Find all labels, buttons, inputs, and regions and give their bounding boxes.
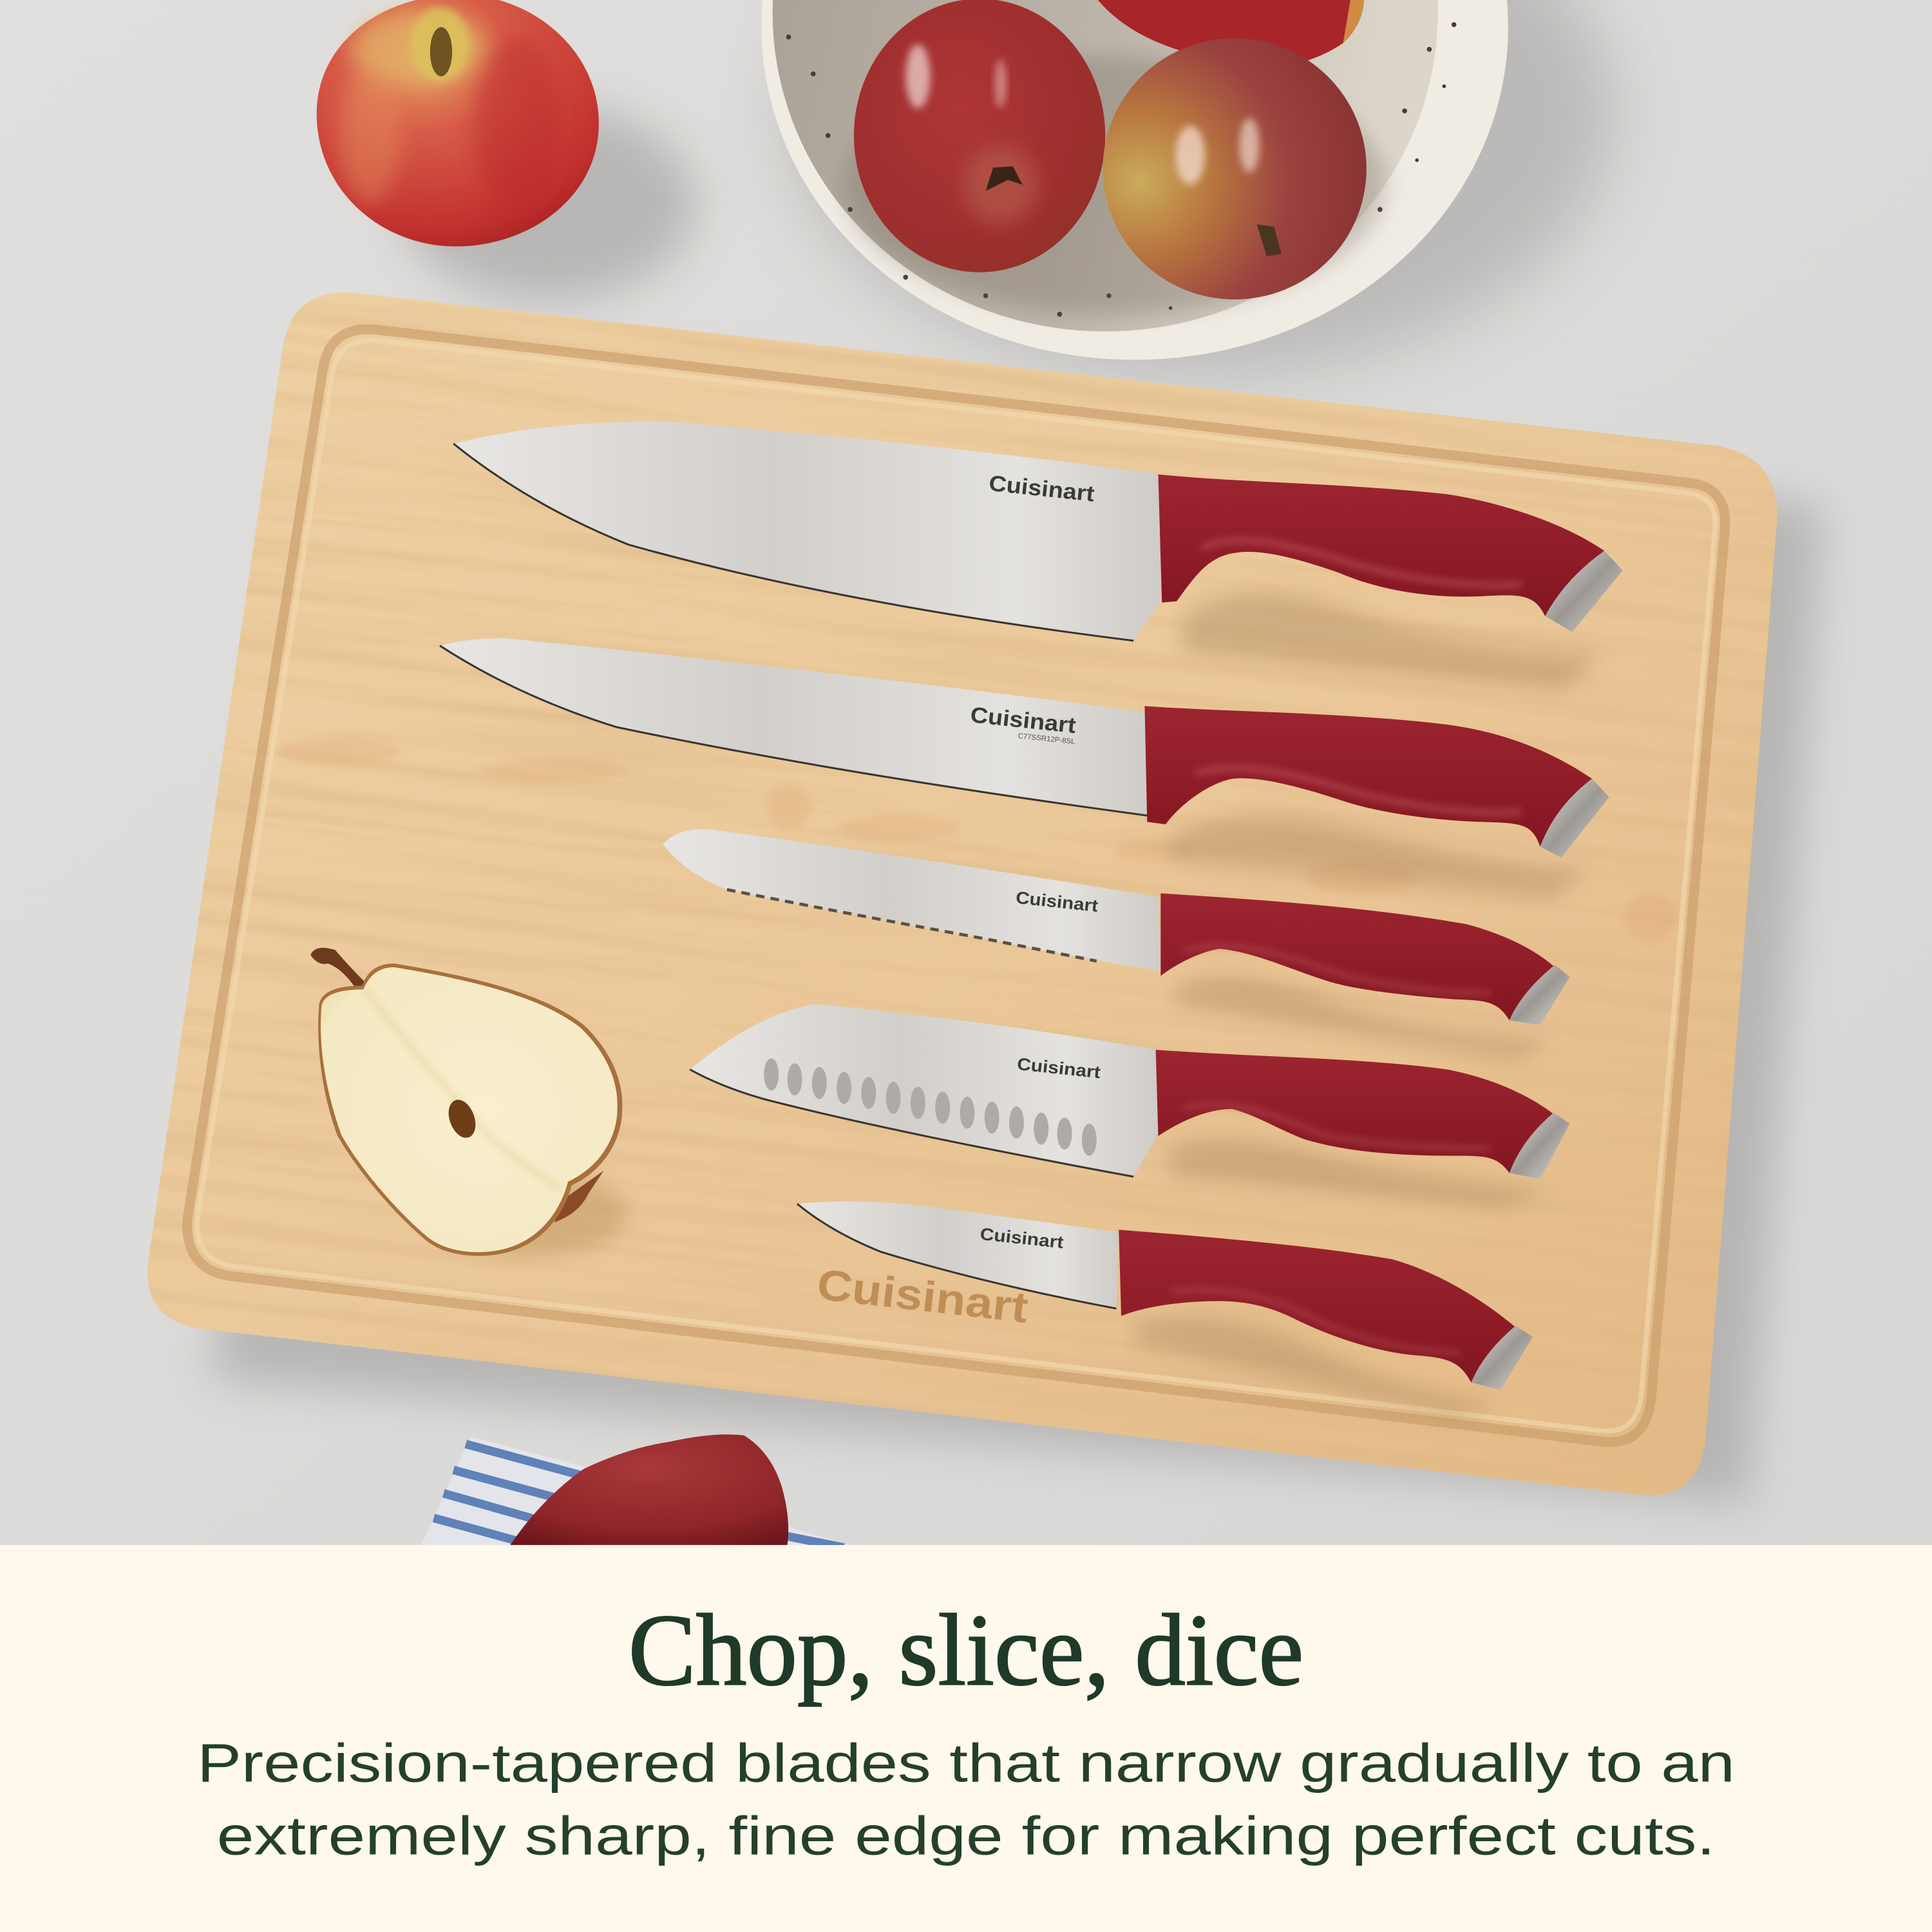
caption panel — [0, 1545, 1932, 1932]
board shadow — [200, 483, 1837, 1516]
handle highlight — [1183, 1104, 1491, 1148]
back red pear — [1098, 0, 1364, 66]
whole red apple — [317, 0, 599, 247]
ceramic bowl with fruit — [761, 0, 1508, 360]
countertop background — [0, 0, 1932, 1545]
handle — [1119, 1229, 1517, 1383]
blade edge — [797, 1204, 1116, 1309]
end cap — [1545, 551, 1623, 632]
handle — [1144, 706, 1592, 846]
knife 2: slicing knife — [440, 638, 1609, 900]
serrated blade — [663, 829, 1160, 971]
knife 1: chef knife — [453, 421, 1623, 690]
end cap — [1540, 779, 1609, 858]
blade edge — [440, 646, 1148, 816]
halved pear — [310, 948, 629, 1257]
handle — [1158, 475, 1604, 616]
handle highlight — [1183, 946, 1491, 993]
blade — [690, 1004, 1158, 1177]
juice groove — [187, 329, 1725, 1442]
knife 3: bread knife — [663, 829, 1570, 1059]
blade edge — [690, 1070, 1133, 1177]
logo: Cuisinart — [979, 1224, 1065, 1252]
logo: Cuisinart — [1015, 888, 1099, 916]
handle — [1156, 1050, 1555, 1173]
red pear on towel — [510, 1434, 788, 1545]
blade — [453, 421, 1160, 641]
description line 1: Precision-tapered blades that narrow gradually to an — [197, 1733, 1735, 1794]
logo: Cuisinart — [1016, 1054, 1101, 1082]
knife 5: paring knife — [797, 1202, 1533, 1417]
engraved board logo: Cuisinart — [815, 1260, 1030, 1332]
maple figure — [277, 737, 1678, 943]
handle — [1160, 893, 1555, 1020]
end cap — [1510, 965, 1570, 1025]
blade dimples — [764, 1058, 1097, 1156]
logo: Cuisinart — [988, 471, 1096, 507]
logo: Cuisinart — [969, 703, 1077, 738]
heading: Chop, slice, dice — [629, 1593, 1303, 1707]
right yellow-red pear — [1103, 38, 1367, 299]
blade — [440, 638, 1148, 816]
serrated edge — [727, 889, 1097, 961]
end cap — [1510, 1113, 1570, 1179]
blade edge — [453, 444, 1133, 641]
description line 2: extremely sharp, fine edge for making perfect cuts. — [217, 1805, 1715, 1866]
bowl shadow — [788, 0, 1614, 376]
handle highlight — [1201, 540, 1522, 585]
blade — [797, 1202, 1119, 1309]
apple shadow — [401, 105, 696, 302]
striped towel — [421, 1434, 850, 1548]
handle highlight — [1195, 768, 1522, 813]
model number: C77SSR12P-8SL — [1018, 732, 1075, 746]
pear seed — [444, 1096, 480, 1142]
handle highlight — [1171, 1290, 1460, 1353]
photo scene — [147, 0, 1837, 1546]
fruit shadow in bowl — [844, 55, 1386, 314]
knife 4: santoku knife — [690, 1004, 1570, 1208]
bowl speckles — [786, 22, 1456, 317]
end cap — [1471, 1326, 1533, 1390]
left red pear — [854, 0, 1105, 272]
